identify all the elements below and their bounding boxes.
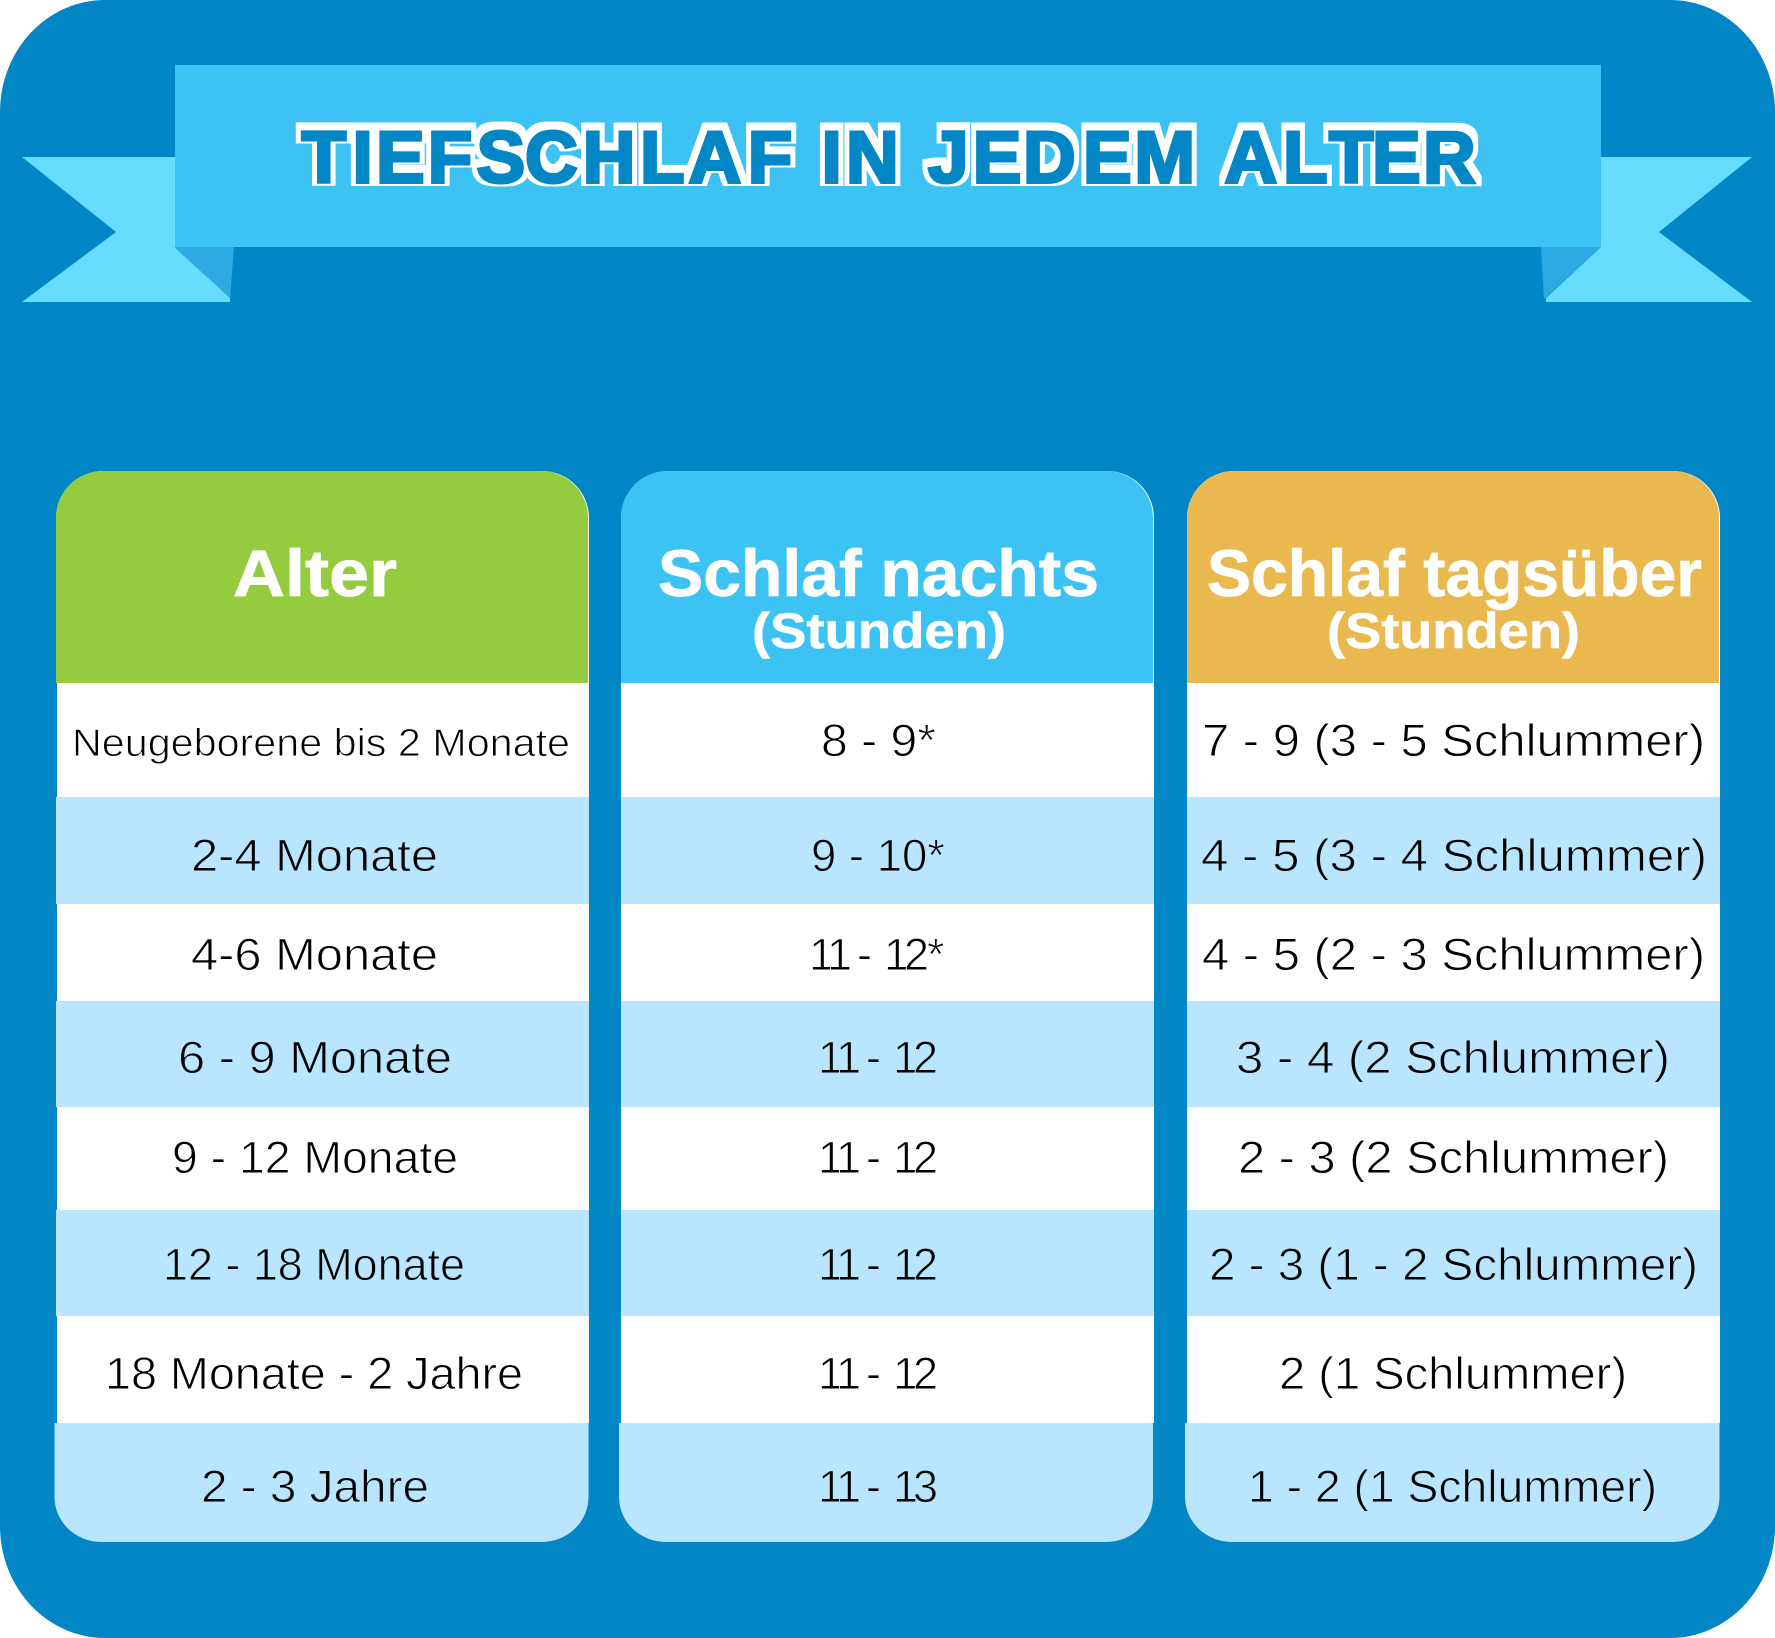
row: 11 - 13: 11 - 13	[818, 1461, 938, 1512]
row: 12 - 18 Monate	[56, 1210, 589, 1316]
row: Neugeborene bis 2 Monate	[57, 683, 589, 797]
row: 2 (1 Schlummer)	[1187, 1316, 1720, 1423]
row: 11 - 13	[619, 1423, 1153, 1542]
row: 9 - 10*	[621, 797, 1154, 904]
row: 4 - 5 (2 - 3 Schlummer)	[1187, 904, 1720, 1001]
header: Alter	[56, 471, 589, 683]
row: 2 (1 Schlummer): 2 (1 Schlummer)	[1279, 1348, 1627, 1399]
right ribbon fold	[1541, 247, 1601, 299]
row: 2 - 3 (2 Schlummer): 2 - 3 (2 Schlummer)	[1238, 1132, 1669, 1183]
row: 9 - 12 Monate: 9 - 12 Monate	[172, 1132, 458, 1183]
row: 1 - 2 (1 Schlummer)	[1185, 1423, 1720, 1542]
row: 2 - 3 Jahre: 2 - 3 Jahre	[201, 1461, 429, 1512]
row: 12 - 18 Monate: 12 - 18 Monate	[163, 1239, 465, 1290]
banner ribbon	[22, 65, 1752, 302]
row: 2 - 3 (2 Schlummer)	[1187, 1107, 1720, 1210]
row: 7 - 9 (3 - 5 Schlummer): 7 - 9 (3 - 5 Schlummer)	[1202, 715, 1705, 766]
header: Schlaf tagsüber: Schlaf tagsüber	[1207, 536, 1702, 610]
right ribbon tail	[1546, 157, 1752, 302]
row: 11 - 12	[621, 1107, 1154, 1210]
header: Schlaf tagsüber: (Stunden)	[1327, 603, 1580, 659]
row: 2 - 3 (1 - 2 Schlummer): 2 - 3 (1 - 2 Schlummer)	[1209, 1239, 1698, 1290]
row: 8 - 9*: 8 - 9*	[821, 715, 936, 766]
row: 11 - 12: 11 - 12	[818, 1239, 938, 1290]
title: TIEFSCHLAF IN JEDEM ALTER	[302, 118, 1476, 198]
row: 3 - 4 (2 Schlummer): 3 - 4 (2 Schlummer)	[1236, 1032, 1670, 1083]
left ribbon tail	[22, 157, 230, 302]
ribbon band	[175, 65, 1601, 247]
header: Schlaf nachts	[621, 471, 1154, 683]
row: 4-6 Monate: 4-6 Monate	[191, 929, 438, 980]
row: 4 - 5 (2 - 3 Schlummer): 4 - 5 (2 - 3 Schlummer)	[1202, 929, 1705, 980]
row: 4 - 5 (3 - 4 Schlummer)	[1187, 797, 1720, 904]
row: 9 - 10*: 9 - 10*	[811, 830, 945, 881]
row: 2-4 Monate: 2-4 Monate	[191, 830, 438, 881]
row: 18 Monate - 2 Jahre	[57, 1316, 589, 1423]
column: Schlaf nachts	[619, 471, 1154, 1542]
row: 11 - 12: 11 - 12	[818, 1032, 938, 1083]
row: 11 - 12*	[621, 904, 1154, 1001]
row: 11 - 12	[621, 1001, 1154, 1107]
row: 8 - 9*	[621, 683, 1154, 797]
row: 7 - 9 (3 - 5 Schlummer)	[1187, 683, 1720, 797]
column: Schlaf tagsüber	[1185, 471, 1720, 1542]
row: 11 - 12: 11 - 12	[818, 1348, 938, 1399]
header: Schlaf nachts: Schlaf nachts	[658, 536, 1099, 610]
left ribbon fold	[174, 247, 234, 298]
row: 2 - 3 Jahre	[54, 1423, 588, 1542]
row: 11 - 12	[621, 1316, 1154, 1423]
row: 11 - 12*: 11 - 12*	[809, 929, 945, 980]
column: Alter	[54, 471, 589, 1542]
row: 6 - 9 Monate	[56, 1001, 589, 1107]
row: 2 - 3 (1 - 2 Schlummer)	[1187, 1210, 1720, 1316]
row: 18 Monate - 2 Jahre: 18 Monate - 2 Jahre	[105, 1348, 523, 1399]
row: 1 - 2 (1 Schlummer): 1 - 2 (1 Schlummer)	[1248, 1461, 1657, 1512]
row: 3 - 4 (2 Schlummer)	[1187, 1001, 1720, 1107]
row: 11 - 12: 11 - 12	[818, 1132, 938, 1183]
row: 4 - 5 (3 - 4 Schlummer): 4 - 5 (3 - 4 Schlummer)	[1201, 830, 1707, 881]
row: 9 - 12 Monate	[57, 1107, 589, 1210]
header: Schlaf nachts: (Stunden)	[752, 603, 1006, 659]
row: 2-4 Monate	[56, 797, 589, 904]
header: Schlaf tagsüber	[1187, 471, 1720, 683]
row: 6 - 9 Monate: 6 - 9 Monate	[178, 1032, 452, 1083]
header: Alter: Alter	[233, 536, 397, 610]
row: 11 - 12	[621, 1210, 1154, 1316]
row: Neugeborene bis 2 Monate: Neugeborene bis 2 Monate	[72, 722, 570, 765]
row: 4-6 Monate	[57, 904, 589, 1001]
